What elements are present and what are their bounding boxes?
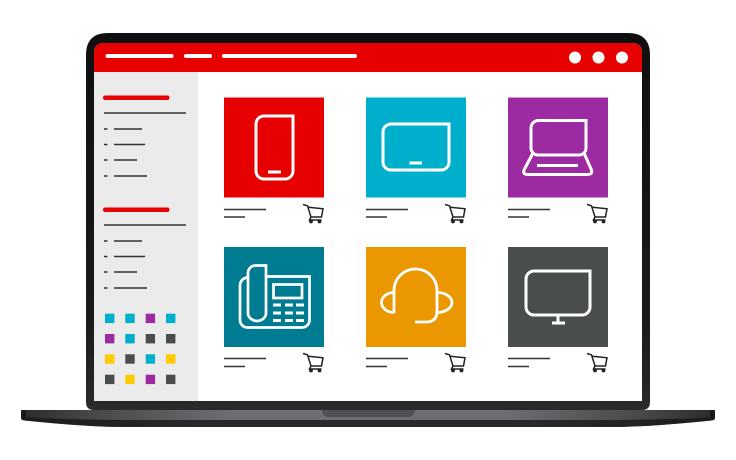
icon: laptop bbox=[524, 120, 592, 174]
product caption bbox=[224, 210, 266, 217]
icon: cart bbox=[303, 204, 323, 223]
product card: monitor bbox=[508, 247, 608, 372]
icon: monitor bbox=[526, 271, 590, 323]
icon: cart bbox=[587, 354, 607, 372]
sidebar menu 2 bbox=[103, 208, 186, 288]
icon: tablet bbox=[383, 124, 449, 170]
product caption bbox=[366, 210, 408, 217]
icon: cart bbox=[445, 204, 465, 223]
laptop base bbox=[21, 410, 715, 427]
product caption bbox=[508, 358, 550, 366]
product caption bbox=[508, 210, 550, 217]
product card: desk phone bbox=[224, 247, 324, 372]
laptop lid bbox=[86, 33, 650, 410]
sidebar menu 1 bbox=[103, 96, 186, 176]
sidebar bbox=[94, 72, 198, 401]
laptop hinge notch bbox=[322, 410, 415, 417]
colour swatches bbox=[105, 314, 175, 384]
product card: tablet bbox=[366, 98, 466, 223]
product card: phone bbox=[224, 98, 324, 223]
top bar bbox=[94, 43, 642, 72]
product caption bbox=[366, 358, 408, 366]
product card: laptop bbox=[508, 98, 608, 223]
icon: cart bbox=[445, 354, 465, 372]
product card: headset bbox=[366, 247, 466, 372]
icon: desk phone bbox=[240, 266, 310, 328]
icon: cart bbox=[303, 354, 323, 372]
screen bbox=[94, 43, 642, 401]
icon: cart bbox=[587, 204, 607, 223]
icon: smartphone bbox=[256, 116, 293, 179]
product caption bbox=[224, 358, 266, 366]
icon: headset bbox=[381, 269, 452, 322]
